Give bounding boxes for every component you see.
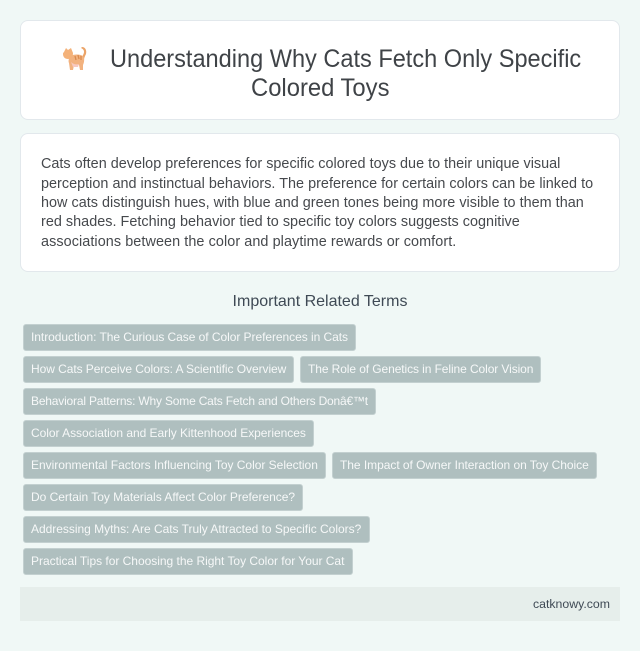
related term tags: How Cats Perceive Colors: A Scientific Overview [31, 362, 286, 376]
related term tags: The Role of Genetics in Feline Color Vision [308, 362, 533, 376]
heading: Colored Toys [251, 74, 389, 102]
intro paragraph card [20, 133, 620, 272]
intro paragraph text: perception and instinctual behaviors. The preference for certain colors can be linked to [41, 176, 593, 192]
intro paragraph text: red shades. Fetching behavior tied to specific toy colors suggests cognitive [41, 214, 520, 230]
related term tags: The Impact of Owner Interaction on Toy Choice [340, 458, 589, 472]
intro paragraph text [41, 156, 593, 250]
related term tags: Do Certain Toy Materials Affect Color Preference? [31, 490, 295, 504]
related term tags: Introduction: The Curious Case of Color Preferences in Cats [31, 330, 348, 344]
related term tags: Environmental Factors Influencing Toy Color Selection [31, 458, 318, 472]
related term tags [23, 324, 597, 575]
section heading: Important Related Terms [233, 293, 407, 310]
footer [20, 587, 620, 621]
related term tags: Behavioral Patterns: Why Some Cats Fetch and Others Donâ€™t [31, 394, 368, 408]
title card [20, 20, 620, 120]
related term tags: Color Association and Early Kittenhood Experiences [31, 426, 306, 440]
intro paragraph text: associations between the color and playtime rewards or comfort. [41, 234, 456, 250]
related term tags: Addressing Myths: Are Cats Truly Attracted to Specific Colors? [31, 522, 361, 536]
footer: catknowy.com [533, 597, 610, 611]
intro paragraph text: how cats distinguish hues, with blue and green tones being more visible to them than [41, 195, 584, 211]
related term tags: Practical Tips for Choosing the Right Toy Color for Your Cat [31, 554, 344, 568]
icon: cat [63, 47, 86, 70]
heading [110, 45, 581, 102]
heading: Understanding Why Cats Fetch Only Specific [110, 45, 581, 73]
intro paragraph text: Cats often develop preferences for specific colored toys due to their unique visual [41, 156, 560, 172]
